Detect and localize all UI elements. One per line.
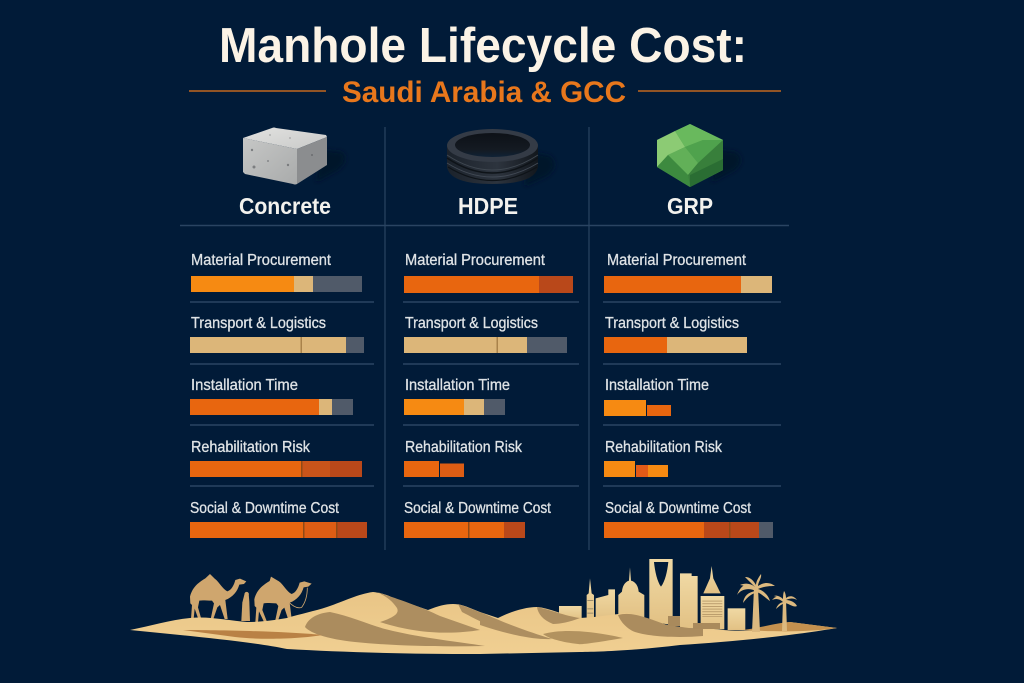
subtitle with rules: Saudi Arabia & GCC [342,76,626,109]
panel: GRP column [603,124,781,538]
dune shadows [183,592,837,646]
row: social [190,500,367,538]
title: Manhole Lifecycle Cost: [219,19,747,73]
column label: Concrete: Concrete [239,193,331,219]
row: transport [604,315,747,353]
row: installation [604,377,709,416]
row: rehabilitation [404,439,523,477]
row: rehabilitation [190,439,362,477]
row: material procurement: Material Procurement [607,252,746,269]
row: rehabilitation: Rehabilitation Risk [405,439,523,456]
row: material procurement [404,252,573,293]
row: social [404,500,551,538]
panel: concrete column [190,128,374,538]
row: material procurement [604,252,772,293]
row: installation [190,377,353,415]
row: social: Social & Downtime Cost [605,500,751,517]
icon: camels and guide [190,574,312,623]
row: installation: Installation Time [405,377,510,394]
illustration: desert and skyline [130,559,837,654]
row: material procurement: Material Procurement [191,252,332,269]
row: rehabilitation: Rehabilitation Risk [191,439,311,456]
row: transport [404,315,567,353]
row: rehabilitation [604,439,723,477]
row: social [604,500,773,538]
row: transport: Transport & Logistics [191,315,326,332]
row: social: Social & Downtime Cost [404,500,551,517]
icon: HDPE ring [447,129,554,186]
icon: palm trees [737,574,797,632]
dune base [130,592,837,654]
row: installation: Installation Time [191,377,298,394]
row: material procurement: Material Procurement [405,252,546,269]
row: transport: Transport & Logistics [605,315,739,332]
panel: HDPE column [403,129,579,538]
icon: city skyline [559,559,745,630]
column label: GRP: GRP [667,193,713,219]
column label: HDPE: HDPE [458,193,518,219]
icon: GRP green gem [657,124,741,187]
row: material procurement [191,252,362,292]
row: rehabilitation: Rehabilitation Risk [605,439,723,456]
row: installation [404,377,510,415]
row: transport [190,315,364,353]
row: transport: Transport & Logistics [405,315,538,332]
row: social: Social & Downtime Cost [190,500,339,517]
row: installation: Installation Time [605,377,709,394]
icon: concrete block [243,128,345,184]
